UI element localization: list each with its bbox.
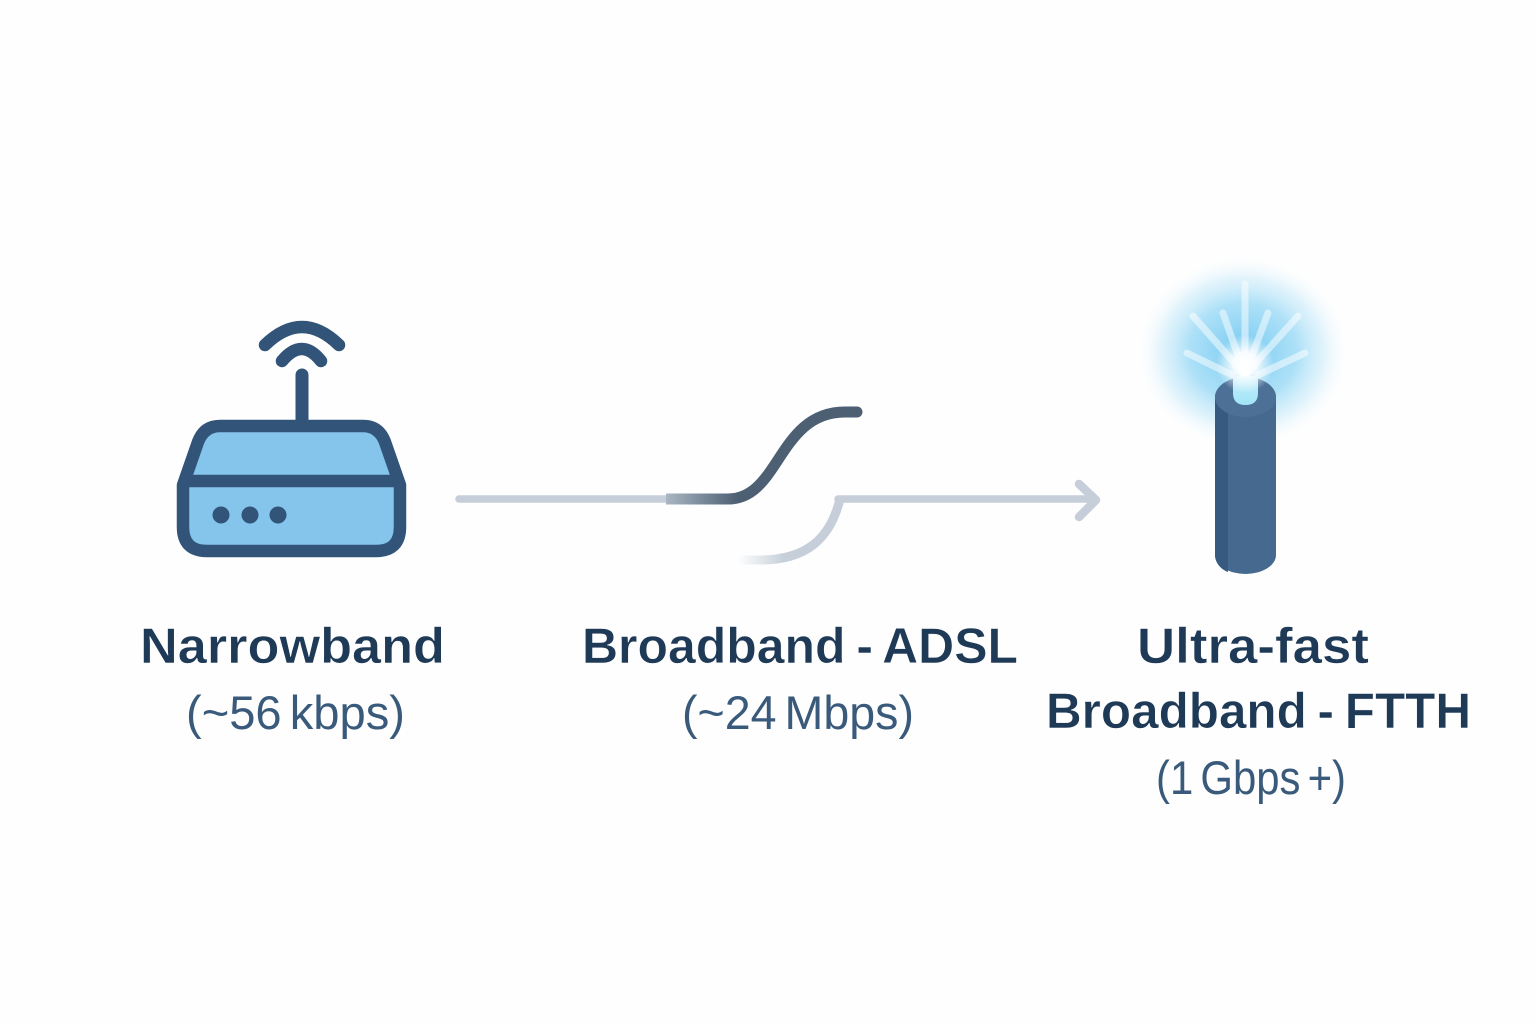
lower fading curve xyxy=(738,499,840,560)
label: narrowband: (~56 kbps) xyxy=(186,686,405,739)
label: ultra-fast broadband FTTH: Ultra-fast xyxy=(1137,618,1369,674)
connection line with arrow xyxy=(459,406,1096,560)
broadband dark curve xyxy=(666,412,857,499)
icon: glowing fibre optic cable xyxy=(1135,254,1351,574)
light rays xyxy=(1187,284,1305,375)
label: narrowband xyxy=(140,618,445,739)
label: ultra-fast broadband FTTH: Broadband - FTTH xyxy=(1046,683,1471,739)
cable shaded side xyxy=(1215,397,1228,572)
status lights xyxy=(212,506,286,524)
label: ultra-fast broadband FTTH xyxy=(1046,618,1471,804)
label: broadband ADSL xyxy=(582,618,1018,739)
router divider xyxy=(183,475,400,487)
cable body xyxy=(1215,378,1276,574)
central flash xyxy=(1216,335,1274,393)
arrow head xyxy=(1079,484,1096,517)
label: ultra-fast broadband FTTH: (1 Gbps +) xyxy=(1156,751,1346,804)
blue glow xyxy=(1135,254,1351,450)
wifi signal arcs xyxy=(265,327,339,361)
cable top face xyxy=(1215,377,1276,417)
glowing core xyxy=(1233,376,1258,405)
narrowband line segment xyxy=(459,495,666,503)
antenna xyxy=(296,375,308,424)
arrow shaft xyxy=(838,495,1094,503)
router body xyxy=(183,426,400,551)
icon: narrowband router xyxy=(183,327,400,551)
label: broadband ADSL: (~24 Mbps) xyxy=(682,686,914,739)
label: narrowband: Narrowband xyxy=(140,618,445,674)
label: broadband ADSL: Broadband - ADSL xyxy=(582,618,1018,674)
dark curve rounded end xyxy=(852,406,862,418)
